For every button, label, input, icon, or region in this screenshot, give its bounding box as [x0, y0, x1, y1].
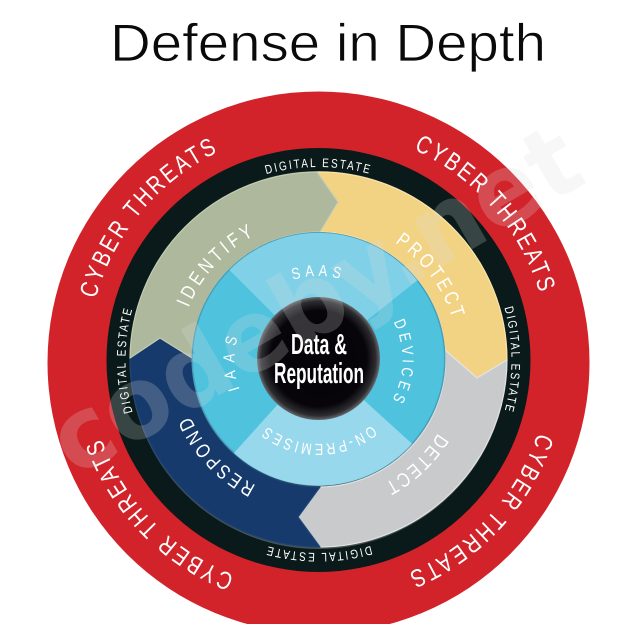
center circle: data and reputation — [257, 297, 380, 420]
arrow: protect — [317, 172, 507, 378]
sector: saas — [230, 233, 417, 359]
title: Defense in Depth — [110, 14, 546, 73]
label: cyber threats upper left: CYBER THREATS — [80, 138, 215, 296]
label: devices: DEVICES — [394, 318, 414, 403]
arrow: identify — [130, 172, 338, 358]
label: iaas: IAAS — [223, 336, 240, 392]
label: cyber threats upper right: CYBER THREATS — [417, 136, 554, 290]
center label — [274, 329, 364, 390]
label: protect: PROTECT — [396, 232, 465, 314]
label: detect: DETECT — [388, 434, 449, 495]
arrow: detect — [298, 350, 507, 547]
label: respond: RESPOND — [180, 419, 255, 497]
label: saas: SAAS — [292, 265, 341, 280]
label: identify: IDENTIFY — [176, 224, 250, 306]
labels: platforms — [223, 265, 414, 455]
label: digital estate top: DIGITAL ESTATE — [264, 158, 370, 174]
labels: cyber threats — [80, 136, 554, 589]
label: cyber threats lower right: CYBER THREATS — [410, 436, 552, 587]
label: on-premises: ON-PREMISES — [262, 427, 376, 455]
labels: process steps — [176, 224, 465, 497]
panel: digital estate ring — [106, 148, 530, 572]
panel: cyber threats ring — [48, 92, 590, 624]
label: data &: Data & — [291, 329, 347, 361]
labels: digital estate — [74, 158, 540, 562]
label: digital estate left: DIGITAL ESTATE — [116, 308, 132, 414]
label: cyber threats lower left: CYBER THREATS — [86, 441, 232, 589]
panel: platforms ring — [192, 232, 446, 486]
panel: process cycle — [130, 171, 508, 549]
label: digital estate right: DIGITAL ESTATE — [504, 306, 520, 412]
ring shadow — [130, 171, 508, 549]
sector: devices and iaas base — [193, 234, 444, 484]
arrow: respond — [130, 338, 320, 547]
label: digital estate bottom: DIGITAL ESTATE — [266, 546, 372, 562]
label: reputation: Reputation — [274, 358, 364, 390]
sector: on-premises — [234, 359, 412, 486]
watermark: codeby.net — [28, 101, 601, 499]
